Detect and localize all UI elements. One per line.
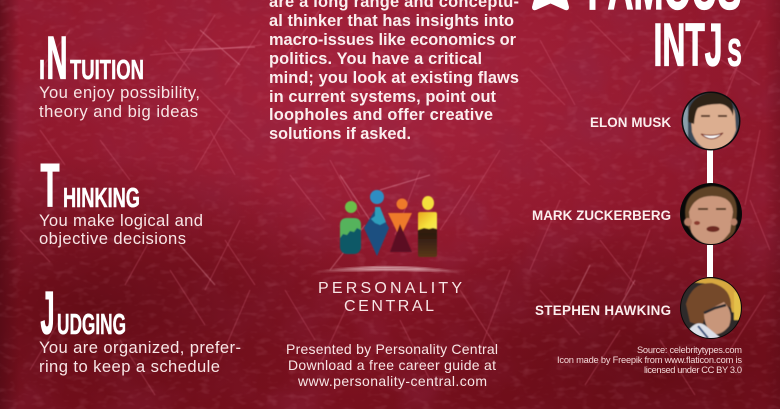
heading: Famous INTJs (588, 0, 742, 78)
icon: orange figure (388, 198, 412, 252)
text: INTJ summary paragraph: al thinker that has insights into (269, 12, 514, 30)
portrait: Stephen Hawking (680, 277, 742, 339)
text: source and credits: Source: celebritytypes.com (637, 345, 742, 355)
section: Intuition (39, 24, 200, 121)
portrait: Elon Musk (680, 90, 742, 152)
icon: green figure (340, 201, 361, 254)
text: presented by: www.personality-central.com (297, 373, 487, 389)
text: judging description: ring to keep a schedule (39, 357, 220, 376)
text: thinking description (39, 211, 203, 248)
heading: Thinking (40, 152, 140, 220)
heading: Thinking: T (40, 152, 60, 220)
person: Stephen Hawking (535, 277, 742, 339)
label: Mark Zuckerberg: MARK ZUCKERBERG (532, 208, 671, 223)
portrait: Mark Zuckerberg (680, 183, 742, 246)
person: Mark Zuckerberg (532, 183, 742, 246)
text: judging description: You are organized, prefer- (39, 338, 241, 357)
text: presented by: Presented by Personality Central (286, 341, 498, 357)
text: source and credits: licensed under CC BY 3.0 (644, 365, 742, 375)
text: INTJ summary paragraph (269, 0, 519, 143)
connector lines (707, 150, 713, 277)
icon: blue figure (364, 190, 389, 256)
icon: yellow figure (418, 196, 437, 257)
text: source and credits (557, 345, 742, 375)
text: judging description (39, 338, 241, 376)
heading: Judging (40, 280, 126, 346)
section: Judging (39, 280, 241, 376)
text: INTJ summary paragraph: in current systems, point out (269, 88, 497, 106)
logo wordmark: CENTRAL (344, 298, 434, 315)
text: intuition description (39, 83, 200, 121)
label: Stephen Hawking: STEPHEN HAWKING (535, 303, 671, 318)
text: source and credits: Icon made by Freepik from www.flaticon.com is (557, 355, 742, 365)
heading: Intuition: TUITION (70, 54, 144, 85)
text: intuition description: theory and big ideas (39, 102, 198, 121)
heading: Intuition (39, 24, 144, 92)
text: presented by (286, 341, 498, 389)
section: Thinking (39, 152, 203, 248)
text: intuition description: You enjoy possibility, (39, 83, 200, 102)
text: INTJ summary paragraph: loopholes and offer creative (269, 106, 493, 124)
text: INTJ summary paragraph: mind; you look at existing flaws (269, 69, 519, 87)
text: INTJ summary paragraph: macro-issues like economics or (269, 31, 517, 49)
heading: Famous INTJs: S (728, 32, 742, 74)
text: INTJ summary paragraph: solutions if asked. (269, 125, 411, 143)
logo swoosh (313, 267, 462, 272)
text: presented by: Download a free career guide at (288, 357, 496, 373)
heading: Thinking: HINKING (63, 182, 140, 213)
heading: Judging: J (40, 280, 54, 346)
heading: Judging: UDGING (57, 309, 126, 341)
text: INTJ summary paragraph: politics. You have a critical (269, 50, 482, 68)
text: thinking description: objective decisions (39, 229, 186, 248)
logo wordmark: PERSONALITY (318, 280, 462, 297)
heading: Intuition: N (46, 24, 68, 92)
person: Elon Musk (590, 90, 742, 152)
icon: star (532, 0, 569, 10)
logo: Personality Central figures (340, 190, 437, 257)
heading: Famous INTJs: INTJ (654, 12, 722, 78)
text: thinking description: You make logical and (39, 211, 203, 230)
logo wordmark (318, 280, 462, 315)
label: Elon Musk: ELON MUSK (590, 115, 671, 130)
heading: Intuition: I (39, 54, 45, 85)
